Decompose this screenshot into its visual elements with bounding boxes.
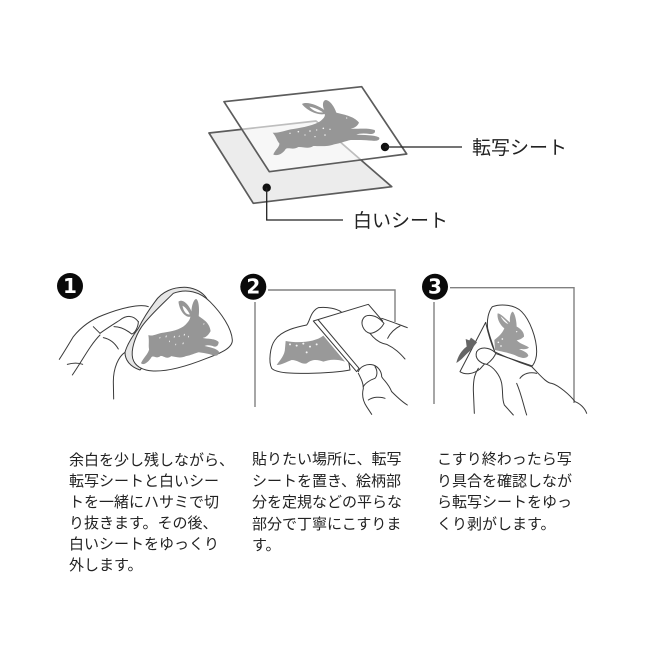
step 3 badge: 3	[428, 275, 442, 299]
step 2 text: 分を定規などの平らな	[252, 494, 402, 511]
lifted rabbit fragment	[456, 338, 477, 363]
hand	[473, 348, 587, 415]
transfer sheet	[224, 87, 407, 172]
step 1 illustration	[59, 287, 233, 399]
sticker	[270, 307, 350, 373]
rabbit partially rubbed	[277, 336, 345, 365]
white sheet	[209, 121, 392, 203]
step 3 text: り具合を確認しなが	[437, 473, 572, 490]
step 2 badge: 2	[246, 275, 260, 299]
backing sheet	[125, 287, 207, 370]
hands	[358, 315, 407, 414]
step 1 text: 白いシートをゆっくり	[69, 536, 219, 553]
step 2 frame	[255, 290, 395, 407]
step 2 text: 貼りたい場所に、転写	[252, 451, 402, 468]
step 3 badge	[422, 274, 448, 300]
step 2 text: 部分で丁寧にこすりま	[252, 516, 401, 533]
step 3 text: くり剥がします。	[437, 516, 556, 533]
label: transfer sheet: 転写シート	[472, 137, 567, 159]
peeled corner	[460, 322, 495, 374]
step 2 text: す。	[252, 537, 281, 554]
step 3 frame	[434, 288, 574, 404]
rabbit on sticker	[140, 294, 233, 374]
step 2 badge	[240, 274, 266, 300]
step 1 text: 転写シートと白いシー	[69, 473, 219, 490]
rabbit design	[273, 100, 379, 155]
leader line: white sheet	[262, 184, 343, 220]
hand	[59, 306, 148, 399]
step 1 badge	[57, 273, 83, 299]
diagram: sheet overview	[209, 87, 462, 220]
ruler	[313, 304, 407, 373]
label: white sheet: 白いシート	[353, 210, 448, 232]
step 3 text	[437, 451, 572, 533]
step 3 text: ら転写シートをゆっ	[437, 494, 572, 511]
step 1 text: トを一緒にハサミで切	[69, 494, 219, 511]
leader line: transfer sheet	[381, 143, 462, 151]
step 1 text	[69, 452, 234, 574]
sticker	[487, 305, 537, 366]
step 1 text: り抜きます。その後、	[69, 515, 218, 532]
step 3 illustration	[456, 305, 587, 415]
step 1 text: 外します。	[69, 557, 143, 574]
step 2 text	[252, 451, 402, 554]
step 2 illustration	[270, 304, 407, 414]
cut-out sticker	[132, 291, 232, 371]
step 1 text: 余白を少し残しながら、	[69, 452, 234, 469]
rabbit being transferred	[494, 312, 529, 358]
step 1 badge: 1	[63, 274, 77, 298]
step 3 text: こすり終わったら写	[437, 451, 572, 468]
step 2 text: シートを置き、絵柄部	[252, 473, 401, 490]
